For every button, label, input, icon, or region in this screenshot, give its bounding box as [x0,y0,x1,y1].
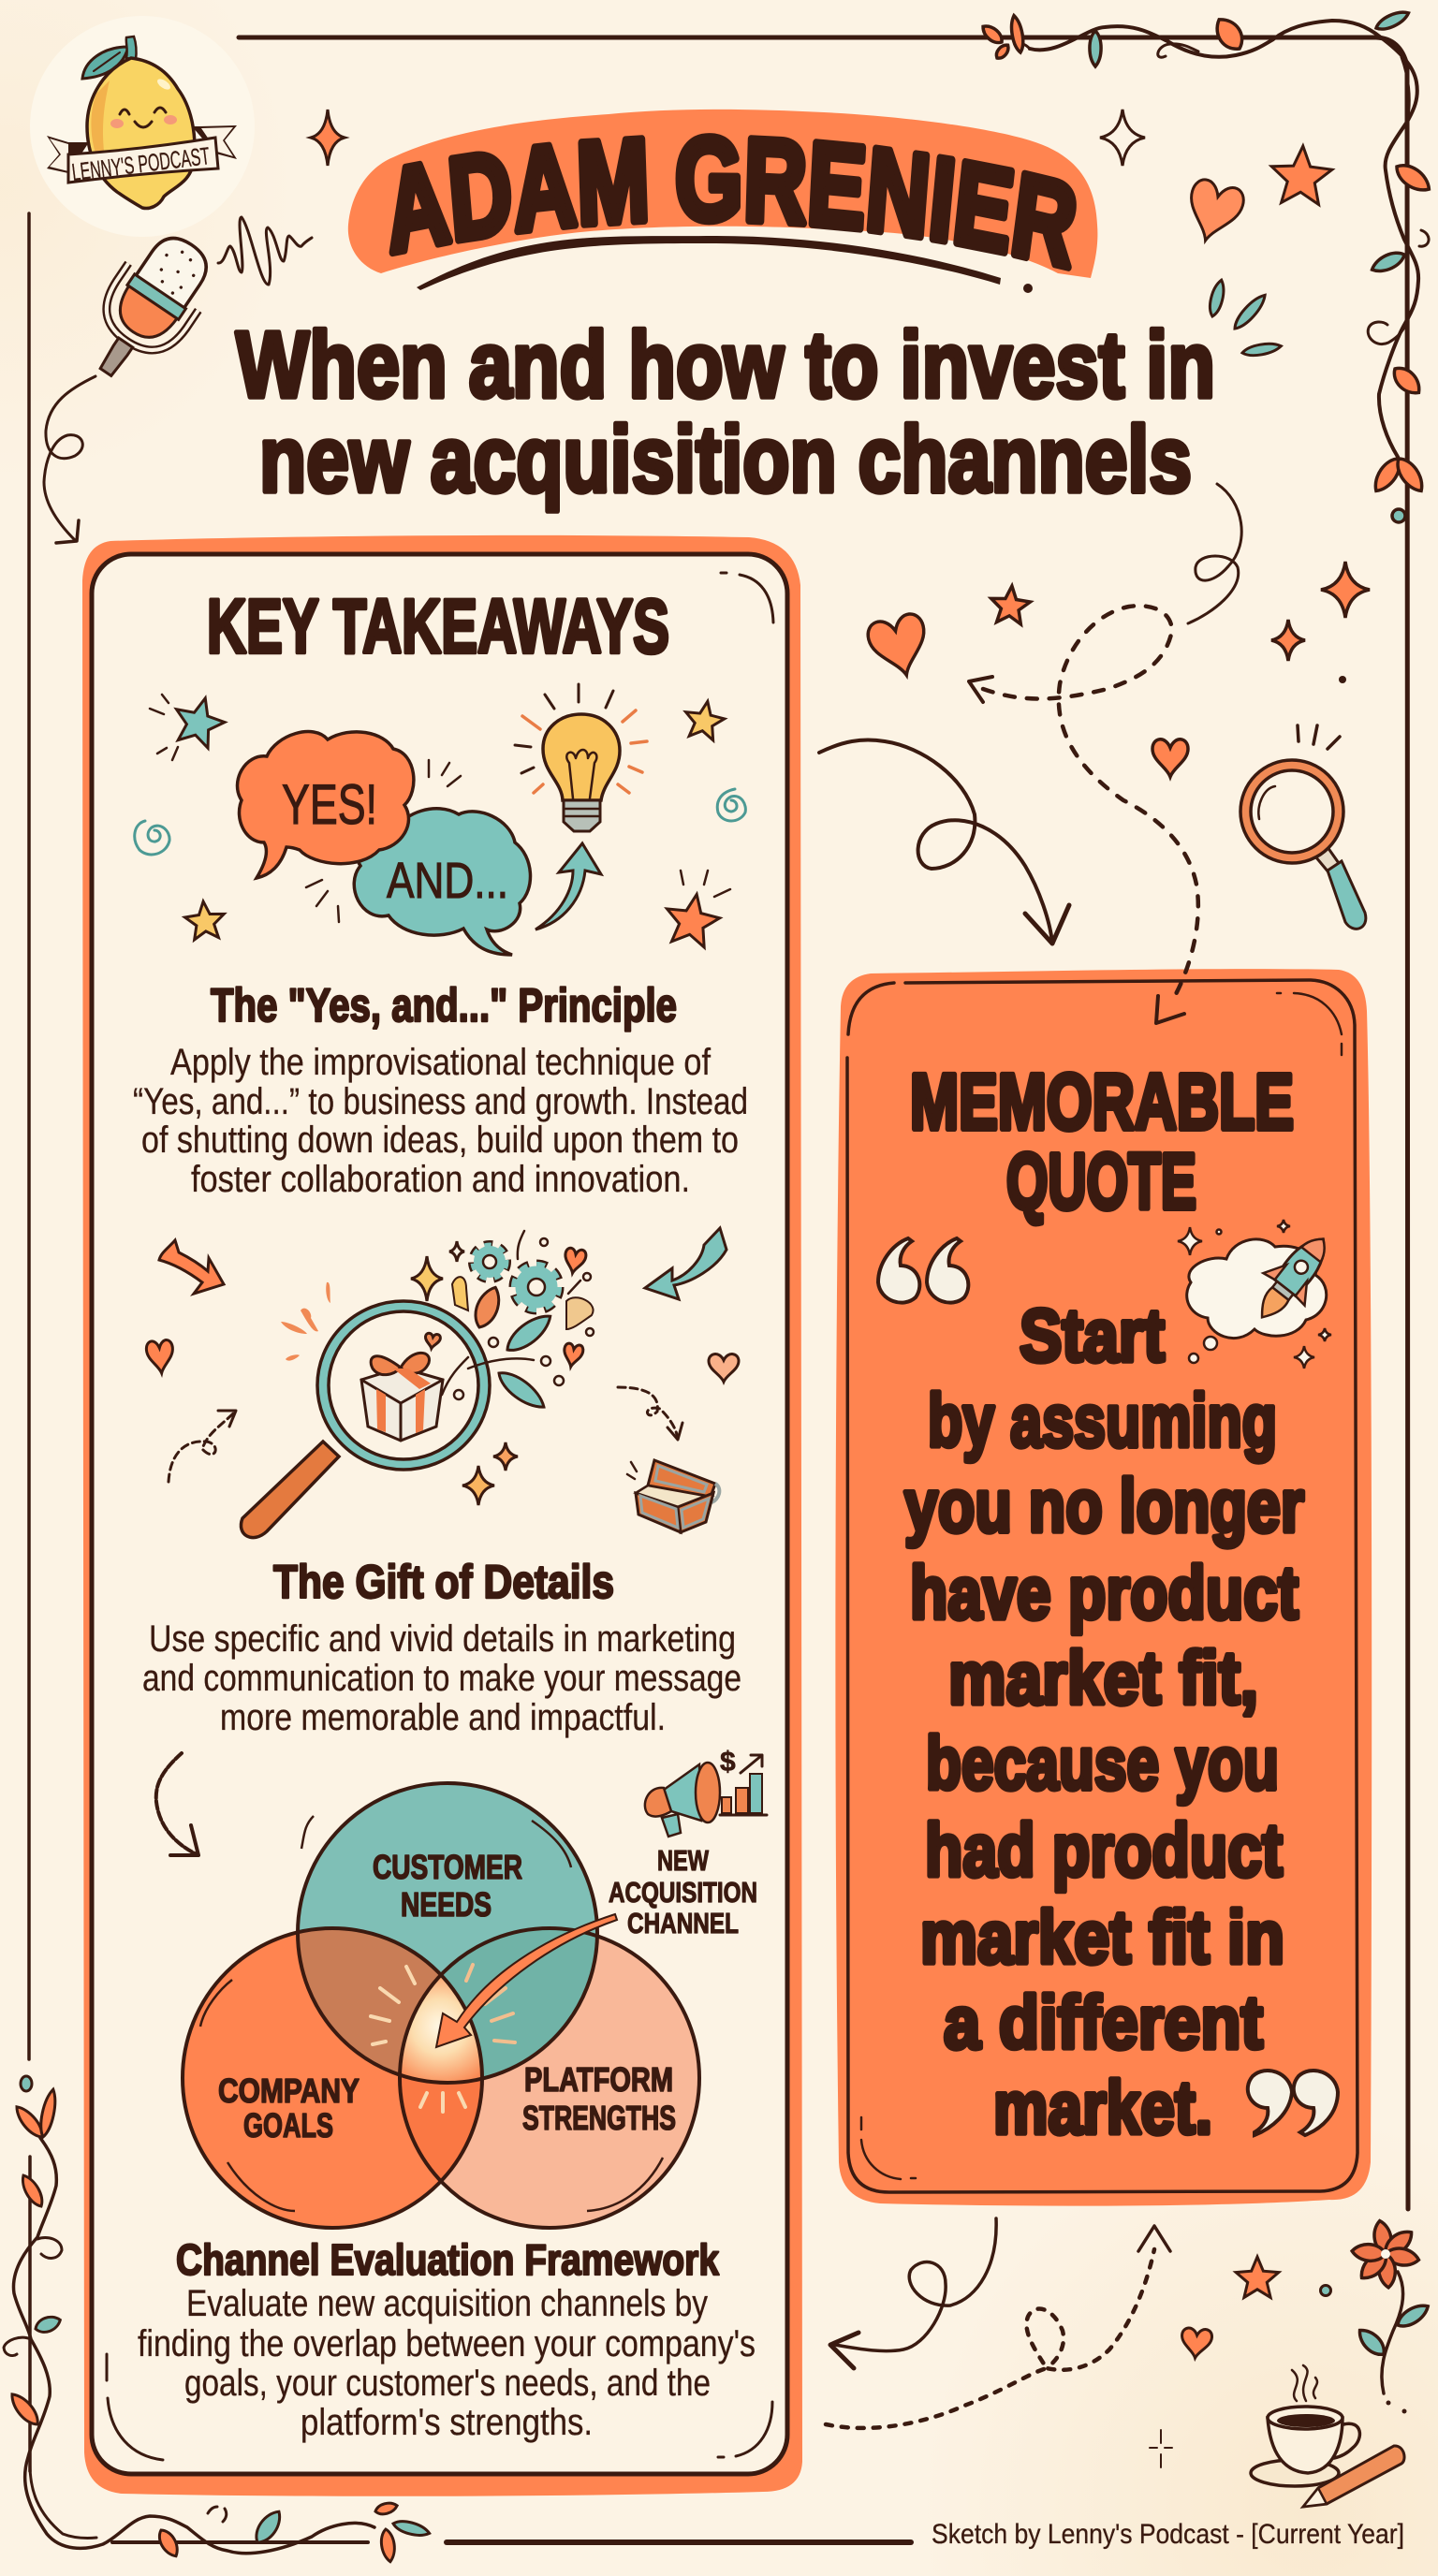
text: quote body: have product [910,1551,1299,1634]
callout: new acquisition channel: NEW [657,1844,710,1877]
icon: lens [317,1301,490,1470]
venn circle: customer needs [298,1783,597,2083]
icon: lemon leaf [82,37,137,79]
icon: orange arrow [159,1240,224,1294]
doodles bottom right [1150,2257,1331,2467]
callout: new acquisition channel [609,1844,757,1939]
title underline [417,236,1001,290]
heading: memorable quote [910,1058,1294,1225]
text: channel evaluation description: platform's strengths. [301,2402,593,2443]
venn circle: company goals [183,1928,482,2228]
text: yes and description: foster collaboration and innovation. [191,1159,690,1200]
venn labels [218,1848,676,2144]
venn burst rays [371,1965,515,2112]
venn labels: COMPANY [218,2071,360,2110]
icon: bursting details [281,1231,594,1505]
title brush background [348,110,1097,278]
doodle hearts [146,1339,739,1382]
icon: teal arrow up [536,843,601,929]
icon: handle [241,1442,339,1538]
arrow to overlap [436,1914,617,2047]
subtitle: When and how to invest in [236,313,1215,417]
sparkles and shapes beside the title [311,110,1333,358]
text: gift of details description: Use specific and vivid details in marketing [149,1618,736,1660]
text: quote body: Start [1020,1294,1165,1377]
icon: gears [476,1248,555,1306]
leaves on the top right vine [979,7,1434,522]
text: yes and description: of shutting down ideas, build upon them to [141,1120,739,1161]
icon: thought cloud with rocket [1178,1220,1343,1368]
icon: and speech bubble: AND... [387,853,508,909]
text: quote body: market. [993,2066,1212,2149]
icon: yes speech bubble [237,732,414,878]
icon: closing quote mark [1248,2071,1338,2135]
banner: Lenny's Podcast: LENNY'S PODCAST [70,141,212,186]
callout: new acquisition channel: ACQUISITION [609,1876,757,1909]
text: channel evaluation description [138,2283,756,2443]
subtitle: new acquisition channels [259,407,1192,512]
text: quote body: you no longer [904,1464,1304,1547]
icon: flower [1351,2219,1431,2413]
text: quote body: by assuming [928,1379,1277,1462]
venn outlines [183,1783,699,2228]
heading: yes and principle: The "Yes, and..." Principle [211,979,677,1032]
icon: microphone with cable [44,221,227,543]
icon: opening quote mark [878,1238,968,1303]
heading: key takeaways: KEY TAKEAWAYS [207,584,669,669]
illustration: magnifying glass over gift [241,1231,594,1538]
callout: new acquisition channel: CHANNEL [627,1907,739,1939]
dashed arrow below quote [826,2226,1170,2428]
icon: coffee cup and pencil [1251,2365,1404,2507]
heading: memorable quote: QUOTE [1006,1137,1196,1225]
icon: treasure chest [627,1460,719,1532]
text: quote body: had product [925,1808,1283,1892]
panel: key takeaways [82,535,802,2496]
logo: Lenny's Podcast lemon [30,16,255,237]
title: Adam Grenier: ADAM GRENIER [389,133,1077,271]
solid curly arrow to quote [819,739,1069,944]
banner: Lenny's Podcast [47,125,237,186]
doodles above quote [865,562,1370,777]
venn labels: STRENGTHS [522,2099,676,2137]
text: channel evaluation description: Evaluate new acquisition channels by [186,2283,708,2324]
icon: megaphone with growth chart: $ [720,1747,736,1778]
heading: gift of details: The Gift of Details [273,1556,614,1608]
dashed looping arrow to quote [969,606,1198,1023]
dashed arrow to venn [156,1753,198,1855]
curly arrow below quote [830,2218,996,2368]
quote panel outline [835,969,1372,2206]
bottom left vine border [4,2076,431,2563]
text: quote body: a different [944,1981,1263,2064]
squiggle from subtitle [1188,484,1241,623]
venn labels: CUSTOMER [373,1848,522,1886]
text: channel evaluation description: finding the overlap between your company's [138,2323,756,2364]
text: channel evaluation description: goals, your customer's needs, and the [184,2363,711,2404]
icon: lemon body [87,58,195,208]
icon: magnifying glass [1240,725,1366,929]
venn labels: NEEDS [401,1885,492,1924]
text: yes and description [133,1042,748,1200]
text: yes and description: Apply the improvisational technique of [170,1042,712,1083]
icon: gift box [361,1353,443,1441]
venn circle: platform strengths [400,1928,699,2228]
venn overlaps [300,1930,595,2178]
icon: yes speech bubble: YES! [282,773,377,836]
text: gift of details description [142,1618,741,1738]
chart: venn diagram [183,1783,757,2228]
heading: memorable quote: MEMORABLE [910,1058,1294,1146]
icon: teal arrow [645,1228,726,1299]
text: quote body [904,1294,1304,2149]
arrow heads near gift [218,1411,682,1440]
panel: memorable quote [835,969,1372,2206]
top right vine border [979,7,1434,522]
illustration: yes and speech bubbles [135,684,745,955]
doodle stars and spirals [135,692,745,949]
icon: and speech bubble [354,809,530,955]
dashed arrows near gift [169,1387,678,1482]
text: gift of details description: more memorable and impactful. [220,1697,666,1738]
text: quote body: market fit, [948,1636,1258,1720]
text: quote body: because you [926,1721,1279,1805]
venn labels: GOALS [243,2106,333,2144]
icon: light bulb [515,684,647,831]
text: quote body: market fit in [920,1895,1284,1979]
heading: channel evaluation framework: Channel Evaluation Framework [176,2235,719,2284]
text: yes and description: “Yes, and...” to business and growth. Instead [133,1081,748,1122]
icon: sound wave [218,217,312,285]
panel outline [82,535,802,2496]
icon: megaphone with growth chart [645,1747,767,1837]
subtitle [236,313,1215,512]
venn labels: PLATFORM [524,2060,673,2099]
text: gift of details description: and communication to make your message [142,1658,741,1699]
